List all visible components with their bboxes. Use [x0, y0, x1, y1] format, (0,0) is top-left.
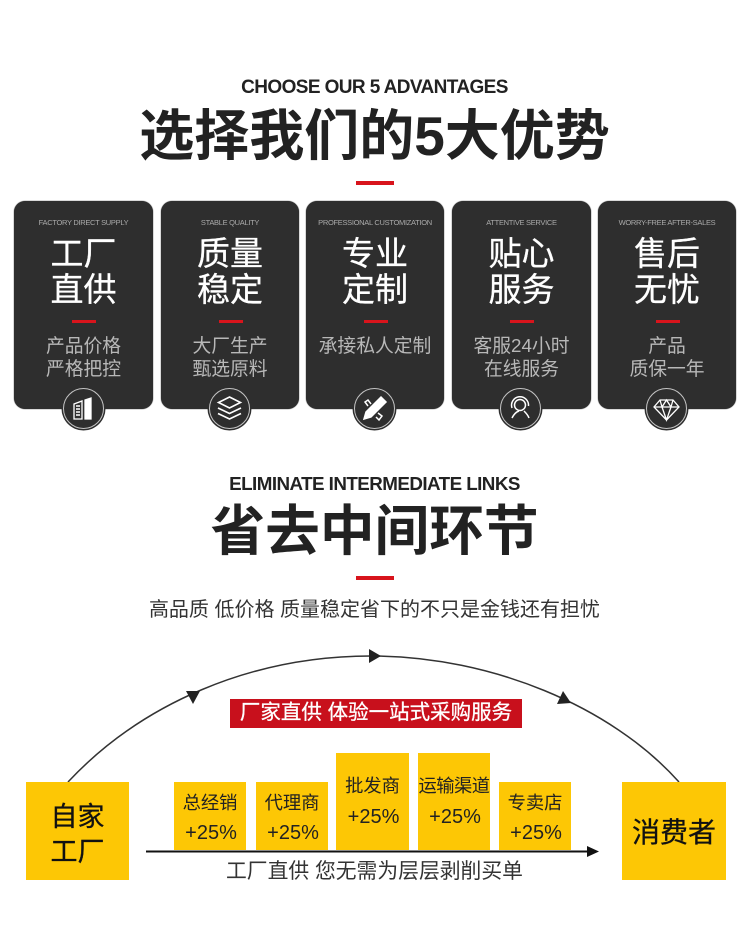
title: five advantages: 选择我们的5大优势	[139, 105, 610, 167]
red bar	[219, 320, 243, 323]
english label: WORRY-FREE AFTER-SALES	[619, 218, 715, 227]
card description: 大厂生产	[192, 335, 268, 356]
card description: 质保一年	[629, 358, 705, 378]
card heading	[50, 235, 116, 308]
horizontal arrow	[146, 846, 599, 857]
red bar	[72, 320, 96, 323]
box: wholesaler: +25%	[348, 806, 399, 828]
box: wholesaler	[336, 753, 409, 850]
card description: 甄选原料	[192, 358, 268, 378]
card heading	[488, 235, 554, 308]
title: eliminate middlemen: 省去中间环节	[210, 500, 539, 562]
heading: choose our 5 advantages: CHOOSE OUR 5 ADVANTAGES	[241, 77, 508, 98]
box: agent: 代理商	[265, 792, 319, 813]
box: general distributor: 总经销	[183, 792, 237, 813]
panel: attentive service	[452, 201, 591, 409]
box: general distributor	[174, 782, 246, 850]
card heading	[634, 235, 700, 308]
box: transport channel: 运输渠道	[418, 775, 490, 796]
box: transport channel: +25%	[429, 806, 481, 828]
icon: layers	[209, 388, 250, 429]
card description: 产品价格	[46, 335, 121, 356]
red bar	[510, 320, 534, 323]
card heading	[197, 235, 263, 308]
panel: stable quality	[161, 201, 299, 409]
box: specialty store	[499, 782, 571, 850]
red divider	[356, 576, 394, 580]
box: wholesaler: 批发商	[345, 775, 400, 796]
panel: factory direct	[14, 201, 153, 409]
banner: direct supply: 厂家直供 体验一站式采购服务	[240, 701, 512, 724]
box: agent	[256, 782, 328, 850]
box: transport channel	[418, 753, 490, 850]
card heading: 贴心	[488, 235, 554, 272]
card description	[46, 335, 121, 378]
icon: pencil and ruler	[354, 388, 395, 429]
box: agent: +25%	[267, 822, 319, 844]
box: specialty store: +25%	[510, 822, 562, 844]
panel: worry-free after-sales	[598, 201, 736, 409]
box: specialty store: 专卖店	[508, 792, 562, 813]
card description: 产品	[648, 335, 686, 356]
card heading: 专业	[342, 235, 408, 272]
english label: FACTORY DIRECT SUPPLY	[39, 218, 128, 227]
card heading: 工厂	[50, 235, 116, 272]
card heading: 售后	[634, 235, 700, 272]
card heading	[342, 235, 408, 308]
box: consumer	[622, 782, 726, 880]
card heading: 直供	[50, 270, 116, 308]
card description: 承接私人定制	[319, 335, 431, 356]
heading: eliminate intermediate links: ELIMINATE INTERMEDIATE LINKS	[229, 473, 520, 494]
english label: STABLE QUALITY	[201, 218, 259, 227]
panel: customization	[306, 201, 444, 409]
card description: 客服24小时	[473, 335, 570, 356]
box: consumer: 消费者	[632, 817, 716, 848]
box: own factory: 自家	[50, 802, 104, 832]
box: own factory: 工厂	[50, 837, 104, 867]
box: own factory	[26, 782, 129, 880]
card heading: 定制	[342, 270, 408, 308]
red bar	[364, 320, 388, 323]
red bar	[656, 320, 680, 323]
box: general distributor: +25%	[185, 822, 237, 844]
red divider	[356, 181, 394, 185]
icon: customer service	[500, 388, 541, 429]
card heading: 无忧	[634, 270, 700, 308]
caption: 工厂直供 您无需为层层剥削买单	[226, 860, 523, 883]
card heading: 稳定	[197, 270, 263, 308]
subtitle: 高品质 低价格 质量稳定省下的不只是金钱还有担忧	[149, 599, 600, 621]
card heading: 质量	[197, 235, 263, 272]
card description	[473, 335, 570, 378]
card description: 在线服务	[484, 358, 559, 378]
english label: PROFESSIONAL CUSTOMIZATION	[318, 218, 432, 227]
card description	[629, 335, 705, 378]
icon: buildings	[63, 388, 104, 429]
icon: diamond	[646, 388, 687, 429]
card description: 严格把控	[46, 358, 121, 378]
card description	[192, 335, 268, 378]
card heading: 服务	[488, 270, 554, 308]
english label: ATTENTIVE SERVICE	[486, 218, 557, 227]
